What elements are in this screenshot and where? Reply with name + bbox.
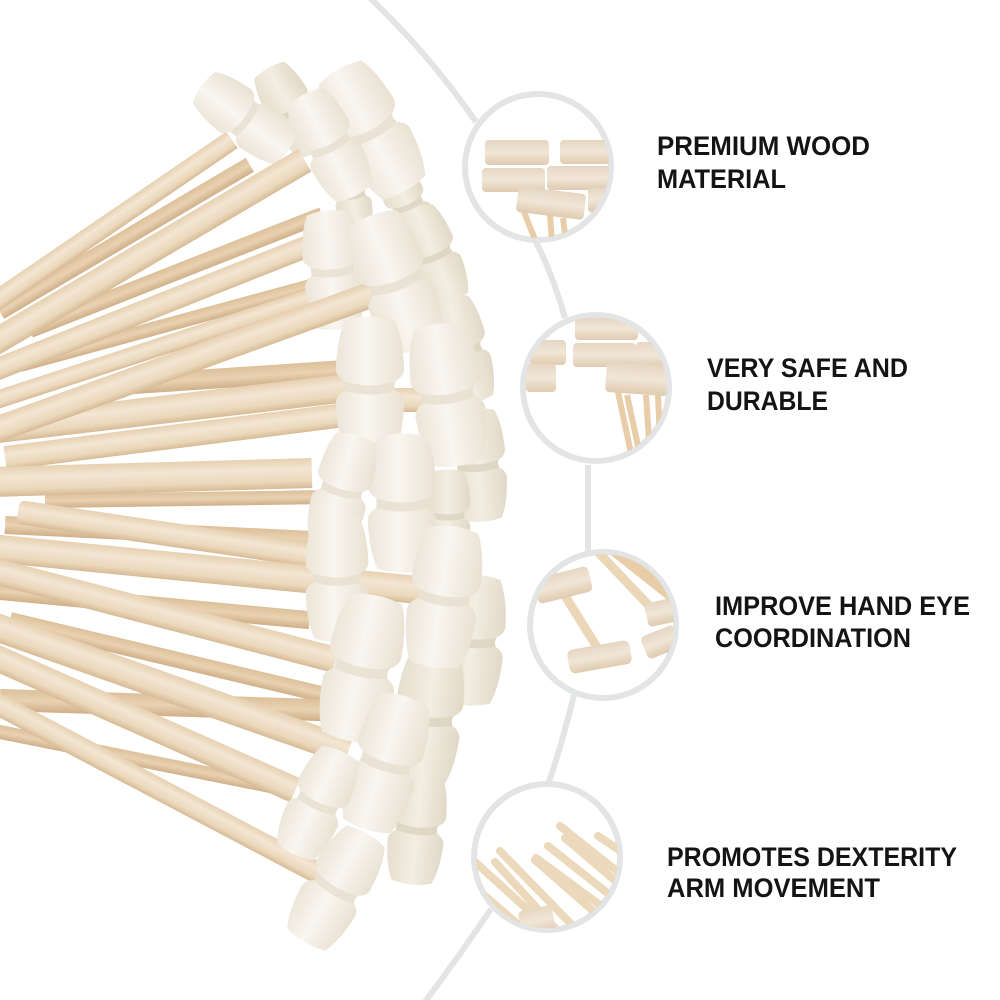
front hammer heads — [269, 316, 493, 958]
label: premium wood material: MATERIAL — [657, 164, 786, 194]
top hammer heads — [0, 53, 453, 444]
label: premium wood material — [657, 131, 870, 194]
label: very safe and durable — [707, 353, 908, 416]
label: improve hand eye coordination — [715, 591, 970, 653]
thumbnail 4 — [472, 784, 622, 937]
label: improve hand eye coordination: IMPROVE HAND EYE — [715, 591, 970, 621]
connecting arc line — [368, 0, 588, 1000]
back hammer sticks — [0, 158, 346, 797]
thumbnail 2 — [523, 315, 669, 461]
label: promotes dexterity arm movement: PROMOTES DEXTERITY — [667, 842, 957, 872]
label: improve hand eye coordination: COORDINATION — [715, 623, 911, 653]
back hammer heads — [247, 56, 510, 888]
label: premium wood material: PREMIUM WOOD — [657, 131, 870, 161]
main hammer sticks — [0, 132, 425, 885]
thumbnail 3 — [530, 550, 682, 698]
label: very safe and durable: VERY SAFE AND — [707, 353, 908, 383]
label: promotes dexterity arm movement — [667, 842, 957, 903]
thumbnail 1 — [465, 94, 611, 242]
label: very safe and durable: DURABLE — [707, 386, 828, 416]
label: promotes dexterity arm movement: ARM MOVEMENT — [667, 873, 880, 903]
